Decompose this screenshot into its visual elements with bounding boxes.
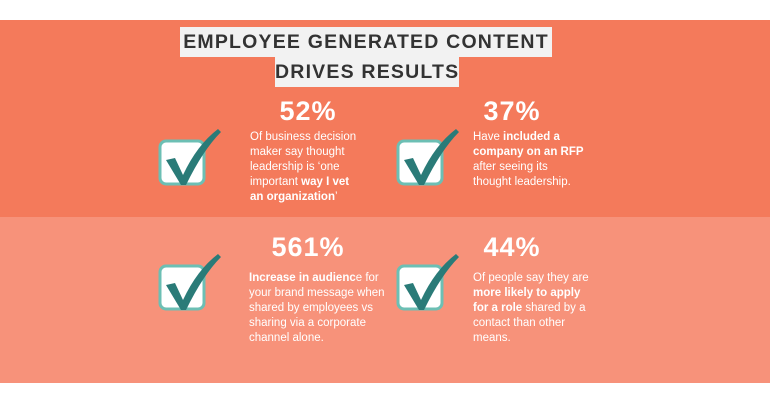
stat 52%	[250, 96, 356, 203]
stat 52%: Of business decision maker say thought leadership is ‘one important way I vet an organization’	[250, 131, 356, 203]
icon: checkbox 3	[158, 254, 221, 310]
stat 44%	[473, 232, 589, 344]
panel: bottom band	[0, 217, 770, 383]
stat 561%	[249, 232, 385, 344]
panel: top band	[0, 20, 770, 217]
title	[180, 27, 552, 87]
icon: checkbox 1	[158, 129, 221, 186]
stat 44%: Of people say they are more likely to apply for a role shared by a contact than other means.	[473, 272, 589, 344]
stat 44%: 44%	[483, 232, 541, 262]
icon: checkbox 4	[396, 254, 459, 310]
stat 37%	[473, 96, 584, 188]
stat 52%: 52%	[279, 96, 337, 126]
icon: checkbox 2	[396, 129, 459, 186]
stat 561%: Increase in audience for your brand message when shared by employees vs sharing via a corporate channel alone.	[249, 272, 385, 344]
stat 561%: 561%	[271, 232, 345, 262]
title: DRIVES RESULTS	[275, 61, 459, 83]
stat 37%: Have included a company on an RFP after seeing its thought leadership.	[473, 131, 584, 188]
stat 37%: 37%	[483, 96, 541, 126]
title: EMPLOYEE GENERATED CONTENT	[183, 31, 549, 53]
